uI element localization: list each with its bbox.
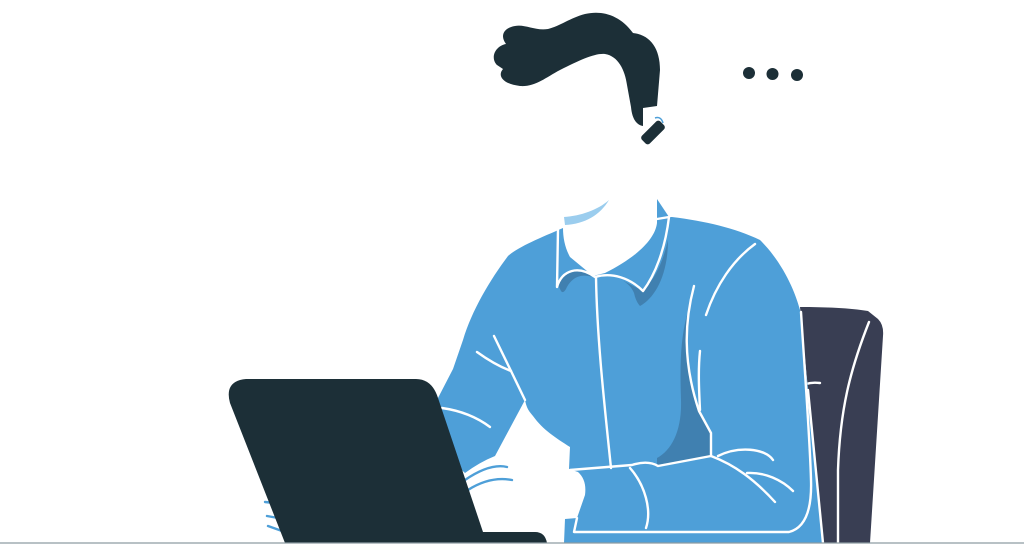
chin shadow bbox=[564, 200, 609, 225]
shirt shadows bbox=[558, 240, 711, 465]
hand finger lines bbox=[265, 466, 512, 531]
collar bbox=[557, 217, 669, 468]
chair bbox=[800, 307, 883, 543]
laptop bbox=[229, 379, 547, 543]
headset earpiece bbox=[640, 118, 666, 146]
shirt bbox=[438, 199, 823, 543]
desk line bbox=[0, 542, 1024, 544]
shirt fold lines bbox=[442, 244, 823, 543]
hair bbox=[494, 13, 660, 126]
typing dots bbox=[743, 67, 803, 81]
